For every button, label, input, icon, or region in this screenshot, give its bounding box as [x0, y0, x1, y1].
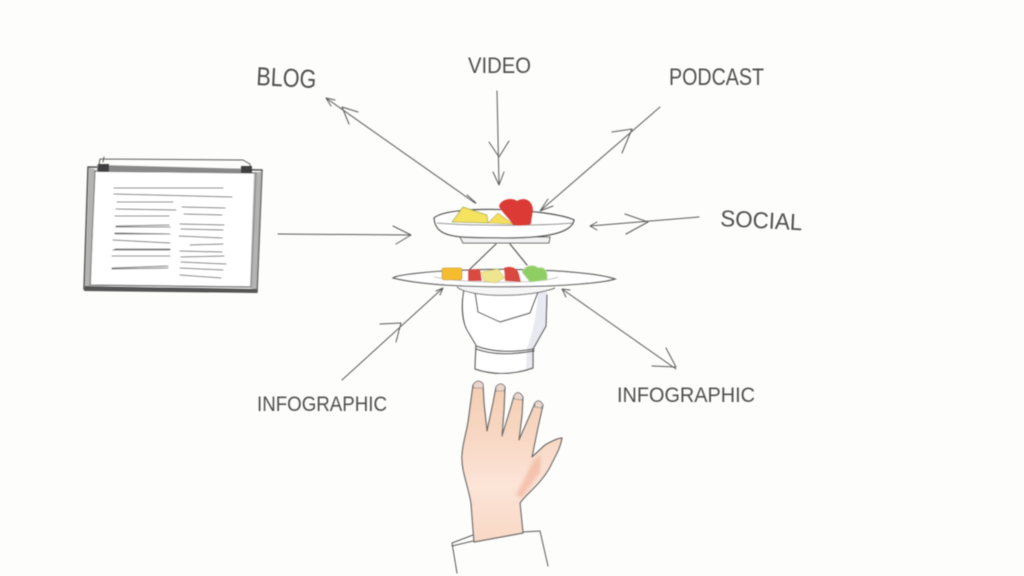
plate stand: [470, 244, 527, 269]
label: video: VIDEO: [468, 53, 531, 78]
food: yellow mix: [481, 269, 505, 283]
label: infographic left: INFOGRAPHIC: [257, 393, 387, 416]
label: infographic right: INFOGRAPHIC: [617, 384, 755, 407]
food: green: [522, 266, 547, 282]
cuff: [452, 531, 548, 573]
arrow: social: [590, 214, 699, 234]
label: blog: BLOG: [256, 61, 317, 94]
upper plate with food: [434, 199, 574, 243]
lower plate with food: [393, 266, 615, 295]
arrow: video: [489, 91, 509, 185]
arrow: podcast: [540, 107, 660, 211]
hand shading: [516, 455, 541, 498]
arrow: blog: [326, 98, 476, 203]
document sketch: [84, 157, 262, 293]
arrow: document to plates: [278, 226, 411, 244]
waiter glove: [462, 288, 548, 376]
arrow: infographic left: [342, 288, 443, 380]
label: podcast: PODCAST: [669, 64, 764, 91]
food: yellow wedge: [452, 207, 488, 223]
reaching hand: [452, 381, 562, 573]
food: red apple: [499, 199, 533, 226]
arrow: infographic right: [562, 289, 676, 369]
food: yellow cube: [442, 268, 462, 280]
hand shape: [462, 381, 562, 542]
food: red pieces: [468, 267, 521, 282]
label: social: SOCIAL: [720, 205, 803, 235]
